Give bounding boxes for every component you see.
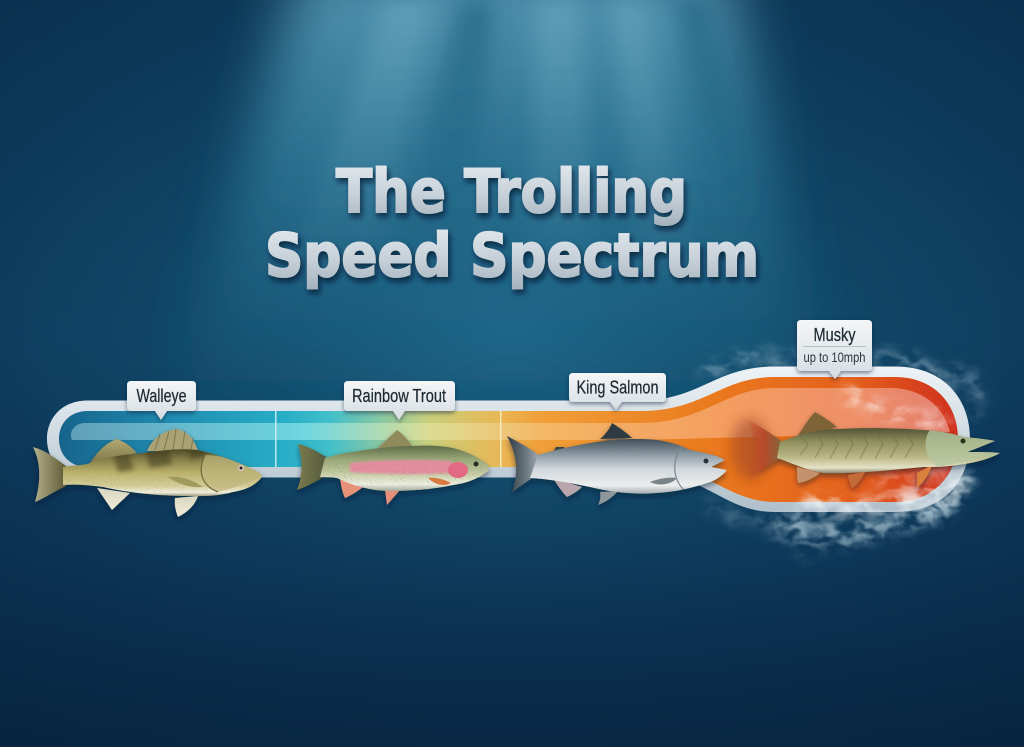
label: King Salmon [569,373,666,410]
label: King Salmon: King Salmon [576,378,658,398]
tube highlight [71,388,950,440]
tube liquid [59,377,958,502]
title line 1: The Trolling [336,157,687,227]
label: Musky up to 10mph: up to 10mph [804,349,866,365]
fish: rainbow trout [297,430,490,505]
title line 2: Speed Spectrum [265,221,759,291]
churning water inside tube [810,392,960,507]
tick: 2 [500,411,502,467]
label: Musky up to 10mph [797,320,872,379]
fish: king salmon [507,423,727,505]
label: Musky up to 10mph: Musky [814,325,856,345]
spectrum tube [47,366,970,512]
water splash behind tube [705,356,976,555]
tick: 1 [275,411,276,467]
fish: walleye [33,429,265,517]
label: Rainbow Trout: Rainbow Trout [352,386,446,406]
label: Rainbow Trout [344,381,455,420]
label: Walleye: Walleye [136,386,186,406]
foam overlay around musky [770,480,965,530]
title [265,157,759,291]
label: Walleye [127,381,196,420]
fish: musky [732,412,1000,488]
tube rim [47,366,970,512]
